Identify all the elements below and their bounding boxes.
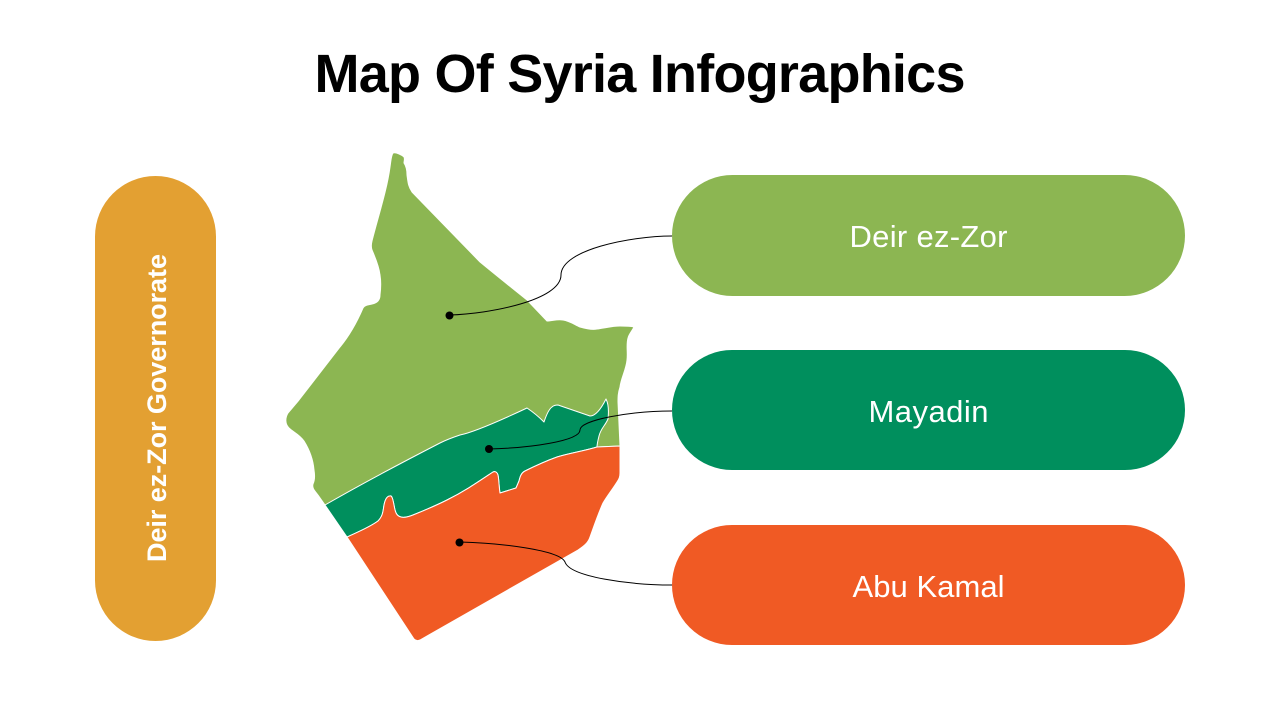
- marker dot: [485, 445, 493, 453]
- connector: Abu Kamal: [456, 538, 672, 585]
- marker dot: [456, 538, 464, 546]
- governorate label text: Deir ez-Zor Governorate: [142, 254, 172, 562]
- title: Map Of Syria Infographics: [314, 44, 966, 104]
- pill: Abu Kamal: [672, 525, 1185, 645]
- connector: Deir ez-Zor: [446, 236, 672, 320]
- region: Deir ez-Zor: [286, 153, 634, 505]
- pill label: Abu Kamal: [852, 569, 1004, 604]
- marker dot: [446, 312, 454, 320]
- pill label: Deir ez-Zor: [850, 219, 1008, 254]
- pill: Mayadin: [672, 350, 1185, 470]
- pill: Deir ez-Zor: [672, 175, 1185, 296]
- map: Deir ez-Zor governorate: [286, 153, 634, 641]
- region: Mayadin: [325, 399, 608, 537]
- panel: governorate label pill: [95, 176, 216, 641]
- pill label: Mayadin: [868, 394, 988, 429]
- region: Abu Kamal: [347, 446, 620, 641]
- connector: Mayadin: [485, 411, 672, 453]
